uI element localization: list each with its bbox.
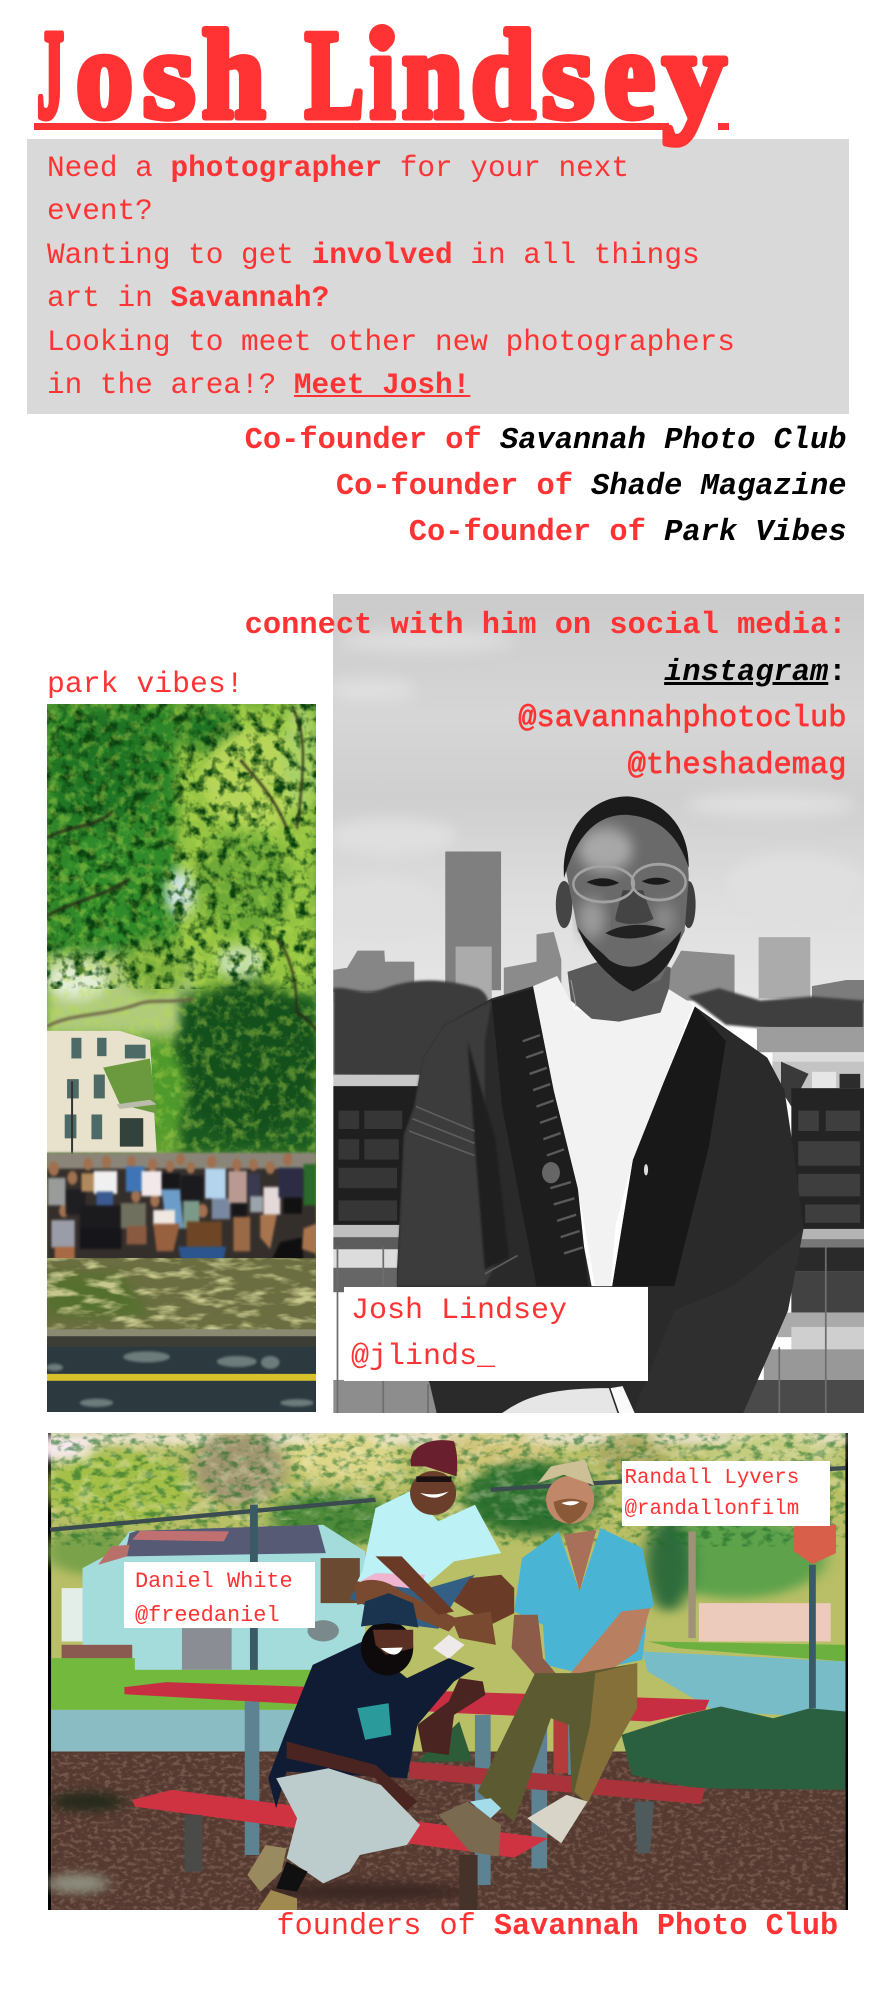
- man: [397, 986, 803, 1413]
- title: s: [143, 6, 195, 145]
- social media links: connect with him on social media: instagram: @savannahphotoclub @theshademag: [245, 609, 846, 782]
- caption: Randall Lyvers: [622, 1461, 830, 1526]
- co-founder list: Co-founder of Savannah Photo Club Co-founder of Shade Magazine Co-founder of Park Vibes: [245, 424, 846, 550]
- caption: Daniel White: Daniel White: [135, 1568, 293, 1594]
- title: L: [305, 6, 364, 145]
- title: e: [604, 6, 655, 145]
- right man: [514, 1528, 653, 1673]
- title: i: [370, 6, 395, 145]
- photo: Josh Lindsey black and white portrait: [333, 594, 864, 1413]
- photo: three founders on picnic table: [48, 1433, 848, 1910]
- title: h: [202, 6, 265, 145]
- caption: Randall Lyvers: @randallonfilm: [624, 1498, 799, 1521]
- caption: Daniel White: [124, 1562, 314, 1628]
- caption: founders of Savannah Photo Club: founders of Savannah Photo Club: [276, 1910, 838, 1944]
- photo: park vibes group under trees: [47, 704, 316, 1412]
- title: o: [76, 6, 133, 145]
- gray intro panel: [27, 139, 849, 414]
- title: y: [663, 6, 726, 145]
- caption: Randall Lyvers: Randall Lyvers: [624, 1467, 799, 1490]
- title: J: [37, 6, 64, 145]
- caption: Daniel White: @freedaniel: [135, 1602, 280, 1628]
- front man: [268, 1641, 474, 1808]
- park vibes heading: park vibes!: [47, 667, 244, 701]
- title: s: [542, 6, 594, 145]
- intro text: Need a photographer for your next event? Wanting to get involved in all things art in Savannah? Looking to meet other new photographers in the area!? Meet Josh!: [47, 152, 735, 402]
- caption: Josh Lindsey: Josh Lindsey: [351, 1294, 567, 1328]
- title: d: [471, 6, 535, 145]
- title: n: [402, 6, 463, 145]
- back man: [349, 1575, 474, 1629]
- caption: Josh Lindsey: [344, 1287, 648, 1381]
- title: [34, 6, 729, 148]
- crowd: [47, 1153, 316, 1270]
- caption: Josh Lindsey: @jlinds_: [351, 1340, 495, 1374]
